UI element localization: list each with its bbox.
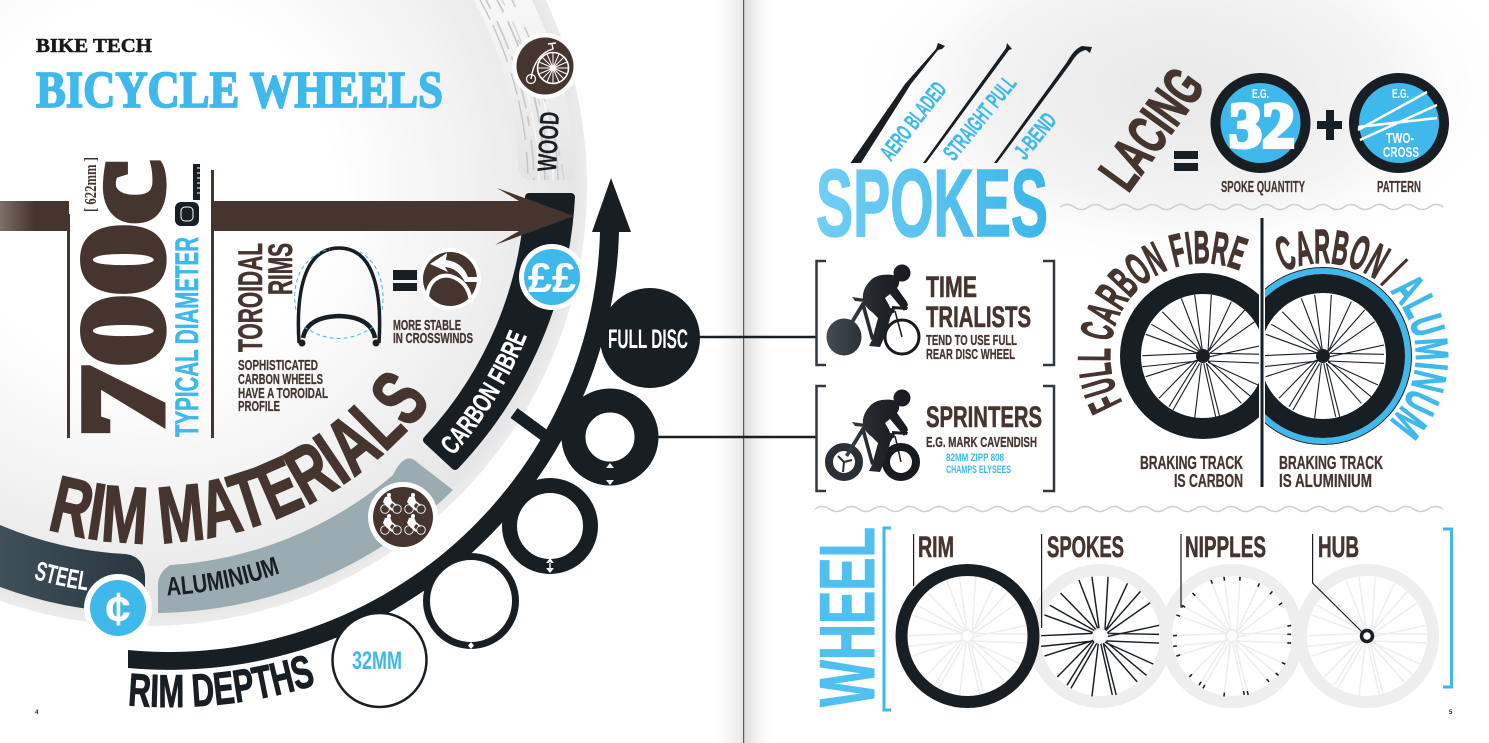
icon: cent badge: ¢ — [105, 583, 131, 635]
label: steel: STEEL — [35, 562, 88, 590]
connector lines to right page — [650, 337, 816, 437]
connector: carbon to rim depth arc — [514, 413, 548, 438]
leader lines — [914, 534, 1362, 632]
divider — [1260, 218, 1264, 487]
disc: full disc — [600, 288, 700, 388]
heading: bike tech: BIKE TECH — [36, 35, 152, 57]
labels: wheel parts: SPOKES — [1047, 531, 1124, 564]
wheel anatomy: nipples highlight — [1166, 570, 1298, 702]
text: sophisticated carbon wheels: HAVE A TOROIDAL — [238, 385, 328, 402]
text: braking track carbon — [1140, 453, 1243, 491]
badge: lacing pattern: CROSS — [1383, 144, 1419, 161]
icon: peloton badge — [368, 482, 438, 552]
text: more stable in crosswinds: IN CROSSWINDS — [393, 330, 473, 347]
panel: sprinters: CHAMPS ELYSEES — [946, 464, 1011, 476]
labels: wheel parts: HUB — [1318, 531, 1359, 564]
band: wood rim material — [474, 0, 575, 180]
label: aluminium: ALUMINIUM — [168, 556, 280, 596]
heading: spokes: SPOKES — [816, 150, 1048, 257]
text: braking track aluminium: IS ALUMINIUM — [1279, 471, 1372, 491]
label: toroidal rims — [232, 243, 300, 352]
text: braking track aluminium: BRAKING TRACK — [1279, 453, 1383, 473]
page number 5: 5 — [1449, 710, 1453, 716]
ring: 32mm rim: 32MM — [352, 647, 402, 675]
panel: time trialists — [816, 261, 1054, 365]
label: typical diameter: TYPICAL DIAMETER — [169, 237, 205, 437]
text: sophisticated carbon wheels: PROFILE — [238, 398, 280, 415]
labels: spoke types: AERO BLADED — [874, 77, 952, 165]
panel: sprinters: 82MM ZIPP 808 — [946, 452, 1004, 464]
labels: spoke quantity and pattern: SPOKE QUANTITY — [1221, 179, 1305, 196]
icon: pound badge — [519, 244, 585, 310]
icon: pound badge: ££ — [528, 254, 576, 301]
label: carbon fibre: CARBON FIBRE — [442, 330, 527, 453]
text: braking track carbon: BRAKING TRACK — [1140, 453, 1243, 473]
icon: cent badge — [84, 574, 152, 642]
heading: carbon: CARBON / — [1276, 229, 1408, 286]
text: more stable in crosswinds: MORE STABLE — [393, 317, 461, 334]
text: more stable in crosswinds — [393, 317, 473, 347]
badge: lacing pattern: E.G. — [1392, 86, 1409, 101]
band: carbon fibre rim material — [427, 197, 571, 466]
ring: mid section rim — [510, 486, 590, 573]
text: braking track carbon: IS CARBON — [1174, 471, 1243, 491]
equals sign — [393, 270, 417, 291]
background: right page gradient — [743, 0, 1489, 743]
labels: wheel parts: NIPPLES — [1185, 531, 1266, 564]
badge: spoke quantity — [1216, 78, 1306, 168]
panel: time trialists: TEND TO USE FULL — [926, 332, 1017, 349]
spoke: aero bladed — [850, 43, 945, 163]
heading: rim materials: RIM MATERIALS — [49, 372, 426, 544]
heading: wheel: WHEEL — [803, 527, 891, 707]
heading: rim depths: RIM DEPTHS — [129, 656, 314, 708]
badge: lacing pattern: TWO- — [1386, 130, 1414, 147]
heading: aluminum: ALUMINUM — [1390, 276, 1449, 441]
icon: crosswind badge — [419, 248, 481, 310]
title: bicycle wheels: BICYCLE WHEELS — [36, 62, 443, 119]
icon: time trial cyclist — [826, 264, 919, 356]
big number: 700c: 700c — [57, 161, 188, 437]
arrow: typical diameter — [0, 188, 574, 245]
ring: deep section rim — [574, 400, 646, 485]
label: toroidal rims: TOROIDAL — [232, 243, 270, 352]
ring: 32mm rim — [332, 613, 426, 707]
wheel: carbon aluminium — [1234, 268, 1412, 444]
background: left page gradient — [0, 0, 744, 743]
equals sign — [1174, 151, 1198, 171]
label: toroidal rims: RIMS — [262, 243, 300, 295]
text: sophisticated carbon wheels — [238, 357, 328, 415]
badge: lacing pattern — [1354, 78, 1444, 168]
labels: wheel parts: RIM — [918, 531, 954, 564]
band: aluminium rim material — [158, 459, 453, 613]
labels: spoke quantity and pattern: PATTERN — [1377, 179, 1421, 196]
badge: spoke quantity: E.G. — [1252, 86, 1269, 101]
panel: time trialists: TIME — [926, 271, 977, 304]
wheel anatomy: spokes highlight — [1034, 570, 1166, 702]
label: wood: WOOD — [532, 111, 565, 172]
icon: sprinter cyclist — [829, 390, 916, 477]
plus sign — [1317, 110, 1342, 140]
diagram: toroidal rim profile — [295, 248, 383, 346]
panel: sprinters: E.G. MARK CAVENDISH — [926, 434, 1037, 451]
brackets: wheel anatomy — [884, 528, 1452, 710]
panel: sprinters: SPRINTERS — [926, 401, 1042, 434]
arrow: rim depth arc — [128, 178, 631, 670]
page number 4: 4 — [35, 710, 39, 716]
text: braking track aluminium — [1279, 453, 1383, 491]
wheel: full carbon fibre — [1130, 284, 1276, 428]
text: sophisticated carbon wheels: CARBON WHEELS — [238, 371, 323, 388]
label: 622mm: [ 622mm ] — [81, 157, 100, 212]
disc: full disc: FULL DISC — [608, 324, 688, 354]
spoke: j-bend — [994, 46, 1092, 163]
labels: spoke types — [874, 70, 1062, 165]
band: steel rim material — [0, 525, 145, 613]
labels: spoke types: J-BEND — [1009, 107, 1062, 164]
panel: time trialists: REAR DISC WHEEL — [926, 346, 1015, 363]
heading: full carbon fibre: FULL CARBON FIBRE — [1078, 230, 1249, 416]
icon: rim section and ruler — [175, 164, 200, 226]
panel: time trialists: TRIALISTS — [926, 301, 1031, 334]
labels: wheel parts — [918, 531, 1359, 564]
wheel anatomy: hub highlight — [1301, 570, 1433, 702]
spoke: straight pull — [923, 43, 1012, 163]
wheel anatomy: rim highlight — [902, 570, 1034, 702]
badge: spoke quantity: 32 — [1229, 90, 1295, 162]
panel: sprinters — [816, 386, 1054, 491]
ring: low section rim — [426, 556, 516, 649]
icon: penny farthing badge — [512, 33, 578, 99]
rules around 700c — [67, 170, 214, 438]
text: sophisticated carbon wheels: SOPHISTICATED — [238, 357, 318, 374]
labels: spoke types: STRAIGHT PULL — [938, 70, 1021, 165]
